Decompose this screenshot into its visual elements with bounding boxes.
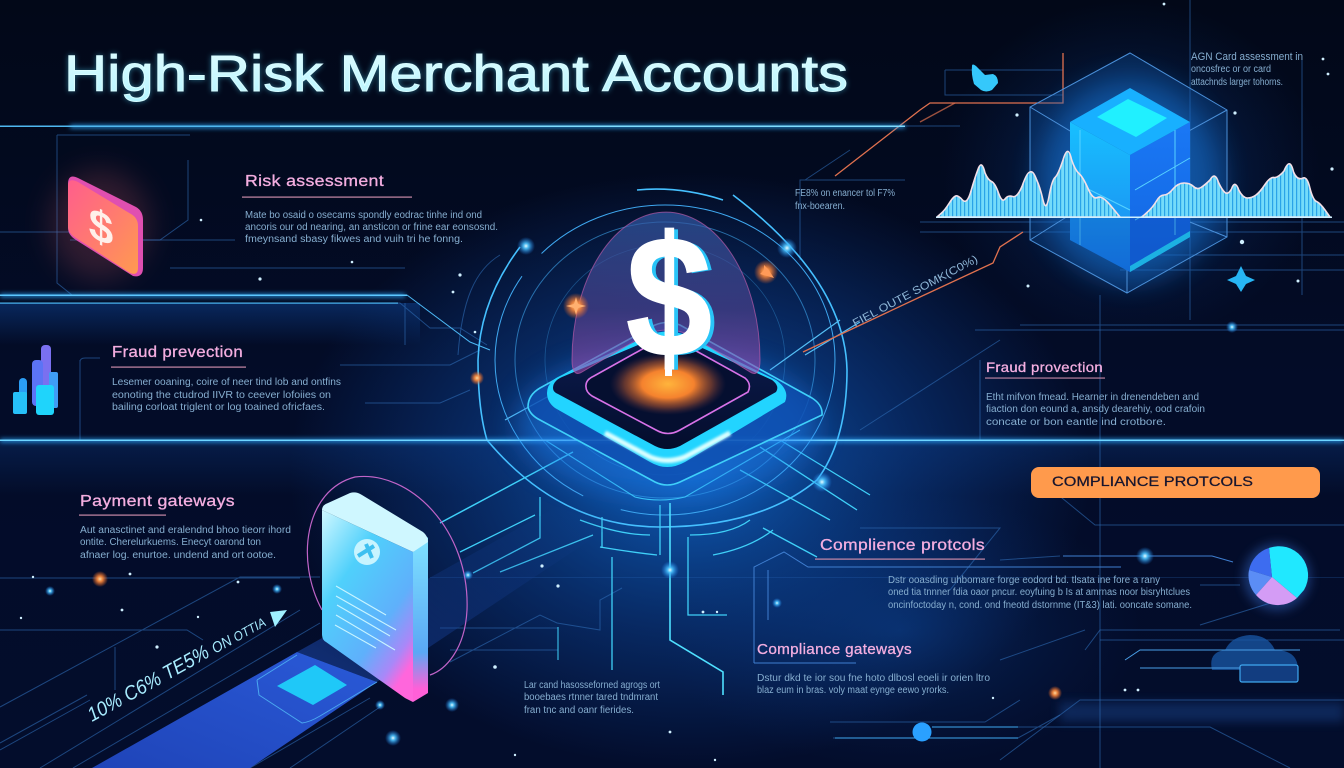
orange glow	[610, 353, 726, 415]
bottom centre note: Lar cand hasosseforned agrogs ort	[524, 680, 660, 691]
middle note: fnx-boearen.	[795, 201, 845, 212]
panel: fraud prevection right	[985, 359, 1205, 428]
icon: bars	[13, 345, 58, 415]
body text	[986, 392, 1205, 428]
bottom centre note: fran tnc and oanr fierides.	[524, 705, 634, 716]
heading: Fraud prevection	[112, 344, 243, 361]
body text: Dstur dkd te ior sou fne hoto dlbosl eoeli ir orien ltro	[757, 673, 990, 684]
rotated connector label: FIEL OUTE SOMK(C0%)	[851, 253, 980, 330]
heading: Compliance gateways	[757, 641, 912, 658]
body text	[80, 525, 291, 561]
horizontal glowing lines	[0, 125, 1344, 442]
icon: document card	[257, 476, 467, 723]
icon: dollar card	[50, 170, 150, 280]
rotated percent strip: 10% C6% TE5% ON OTTIA	[84, 610, 269, 726]
teal square	[277, 665, 347, 705]
icon: small cyan ribbon	[972, 64, 998, 92]
body text: ontite. Cherelurkuems. Enecyt oarond ton	[80, 537, 261, 548]
top-right note: AGN Card assessment in	[1191, 51, 1303, 63]
body text: Mate bo osaid o osecams spondly eodrac tinhe ind ond	[245, 210, 482, 221]
platform top	[553, 337, 777, 449]
body text: Etht mifvon fmead. Hearner in drenendeben and	[986, 392, 1199, 403]
body text	[245, 210, 498, 245]
icon: pie chart	[1243, 543, 1311, 611]
body text: fiaction don eound a, ansdy dearehiy, ood crafoin	[986, 404, 1205, 415]
top-right note	[1191, 51, 1303, 88]
heading: Risk assessment	[245, 173, 384, 190]
bottom centre note	[524, 680, 660, 716]
body text: Dstr ooasding uhbomare forge eodord bd. tlsata ine fore a rany	[888, 575, 1160, 586]
body text: bailing corloat triglent or log toained ofricfaes.	[112, 402, 325, 413]
icon: four-point star	[1227, 266, 1255, 292]
central rings	[478, 189, 860, 527]
document lines	[335, 586, 396, 650]
orange sparks	[563, 260, 778, 319]
body text: afnaer log. enurtoe. undend and ort ootoe.	[80, 550, 276, 561]
body text: concate or bon eantle ind crotbore.	[986, 417, 1166, 428]
body text: ancoris our od nearing, an ansticon or frine ear eonsosnd.	[245, 222, 498, 233]
callout: compliance protocols pill: COMPLIANCE PROTCOLS	[1052, 473, 1253, 489]
callout: compliance protocols pill	[1031, 467, 1320, 498]
inner pink outline	[586, 339, 749, 434]
title: High-Risk Merchant Accounts	[64, 45, 848, 102]
wire cube	[1030, 53, 1227, 293]
icon: dollar card: $	[89, 198, 113, 257]
heading: Fraud provection	[986, 359, 1103, 375]
middle note: FE8% on enancer tol F7%	[795, 188, 895, 199]
panel: compliance protocols	[815, 537, 1192, 611]
body text: blaz eum in bras. voly maat eynge eewo yrorks.	[757, 685, 949, 696]
top-right note: oncosfrec or or card	[1191, 64, 1271, 75]
blue node with connector	[835, 722, 1018, 742]
middle note	[795, 188, 895, 212]
lower circuit traces	[440, 430, 870, 695]
floor band	[92, 505, 620, 768]
server glow	[1040, 80, 1220, 280]
panel: compliance gateways	[757, 641, 990, 696]
panel: central dollar platform	[517, 200, 822, 495]
platform outer frame	[528, 322, 822, 485]
server block	[1070, 88, 1190, 272]
body text	[888, 575, 1192, 611]
icon: cloud	[1125, 635, 1300, 682]
heading: Complience protcols	[820, 537, 985, 554]
panel: risk assessment	[50, 170, 498, 280]
panel: fraud prevection left	[13, 344, 341, 415]
body text: oncinfoctoday n, cond. ond fneotd dstornme (IT&3) lati. ooncate somane.	[888, 600, 1192, 611]
title: High-Risk Merchant Accounts	[64, 45, 848, 102]
body text: fmeynsand sbasy fikwes and vuih tri he fonng.	[245, 234, 463, 245]
glass dome	[572, 212, 760, 374]
body text	[757, 673, 990, 696]
top-right note: attachnds larger tohorns.	[1191, 77, 1283, 88]
body text: oned tia tnnner fdia oaor pncur. eoyfuing b Is at amrnas noor bisryhtclues	[888, 587, 1190, 598]
compliance connector lines	[754, 552, 1233, 663]
body text: Lesemer ooaning, coire of neer tind lob and ontfins	[112, 377, 341, 388]
bottom centre note: booebaes rtnner tared tndmrant	[524, 692, 658, 703]
panel: top-right chart and server	[936, 53, 1332, 293]
heading: Payment gateways	[80, 493, 235, 510]
body text	[112, 377, 341, 413]
orange connector lines	[803, 53, 1063, 352]
dollar sign: $	[630, 201, 717, 394]
panel: payment gateways	[79, 493, 291, 561]
body text: eonoting the ctudrod IIVR to ceever lofoiies on	[112, 390, 331, 401]
body text: Aut anasctinet and eralendnd bhoo tieorr ihord	[80, 525, 291, 536]
platform base	[547, 332, 786, 467]
dollar sign: $	[626, 200, 712, 393]
line chart	[936, 151, 1332, 218]
rim highlight	[605, 433, 730, 460]
emblem	[354, 539, 380, 565]
